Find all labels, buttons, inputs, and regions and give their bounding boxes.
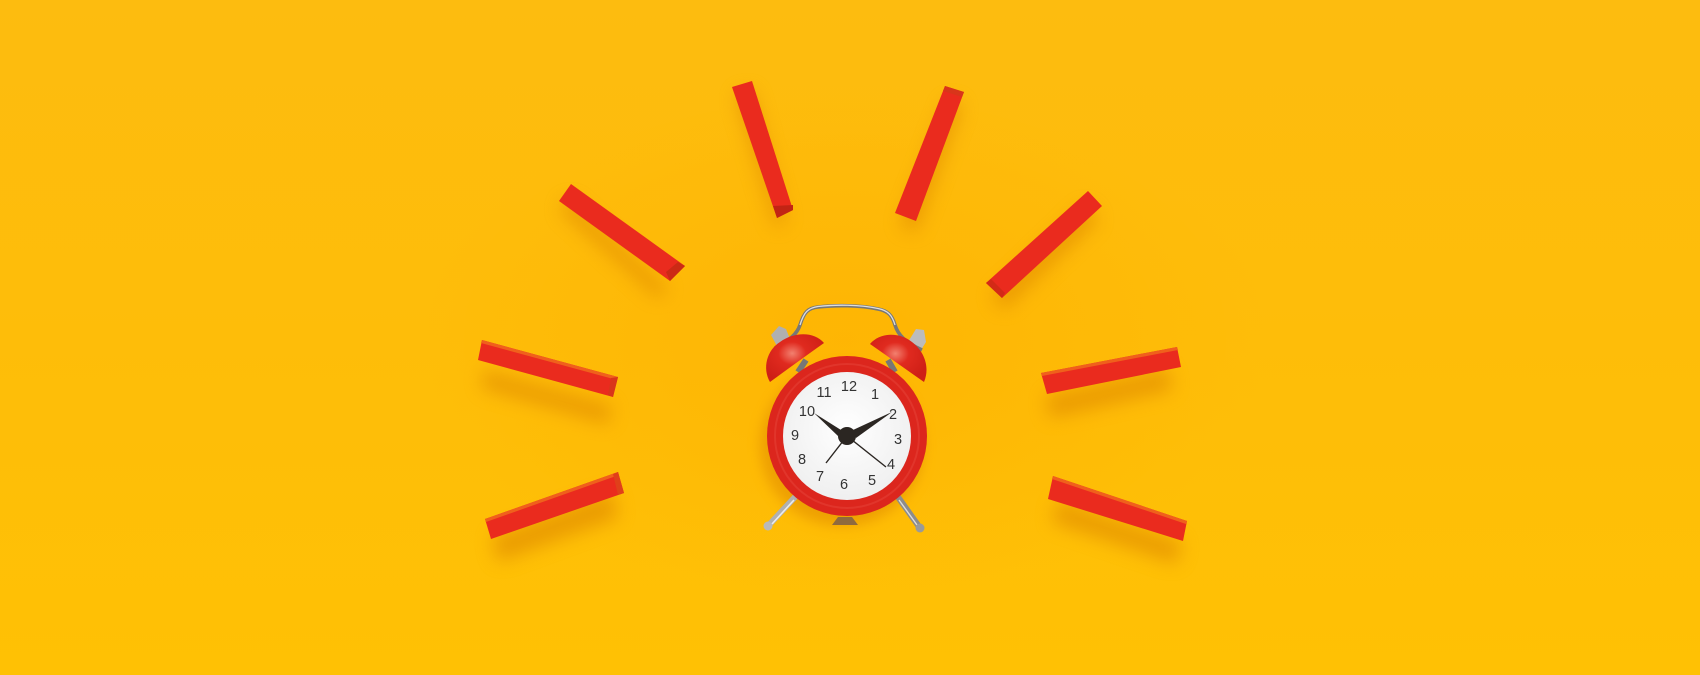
bar: lower left xyxy=(485,472,624,539)
shadows under bars xyxy=(482,90,1182,564)
bar: upper left xyxy=(559,184,685,281)
clock numerals: 1 xyxy=(871,387,879,403)
clock legs xyxy=(764,497,924,532)
clock numerals: 12 xyxy=(841,379,857,395)
clock numerals: 5 xyxy=(868,473,876,489)
clock numerals: 2 xyxy=(889,407,897,423)
bar: top left of centre xyxy=(732,81,793,218)
bar: top right of centre xyxy=(895,86,964,221)
left bell xyxy=(766,334,824,382)
clock case xyxy=(767,356,927,516)
clock numerals: 8 xyxy=(798,452,806,468)
clock numerals: 7 xyxy=(816,469,824,485)
clock face xyxy=(783,372,911,500)
clock hands xyxy=(814,412,892,467)
clock numerals: 6 xyxy=(840,477,848,493)
clock numerals: 9 xyxy=(791,428,799,444)
clock numerals: 4 xyxy=(887,457,895,473)
bar: middle left xyxy=(478,340,618,397)
handle xyxy=(775,305,922,350)
icon: alarm clock xyxy=(760,305,927,532)
bar: middle right xyxy=(1041,347,1181,394)
bar: upper right xyxy=(986,191,1102,298)
right bell xyxy=(870,335,927,382)
clock numerals xyxy=(791,379,902,493)
bell stems and knobs xyxy=(771,326,926,372)
clock numerals: 3 xyxy=(894,432,902,448)
bar: lower right xyxy=(1048,476,1187,541)
clock numerals: 11 xyxy=(816,385,832,401)
clock numerals: 10 xyxy=(799,404,815,420)
